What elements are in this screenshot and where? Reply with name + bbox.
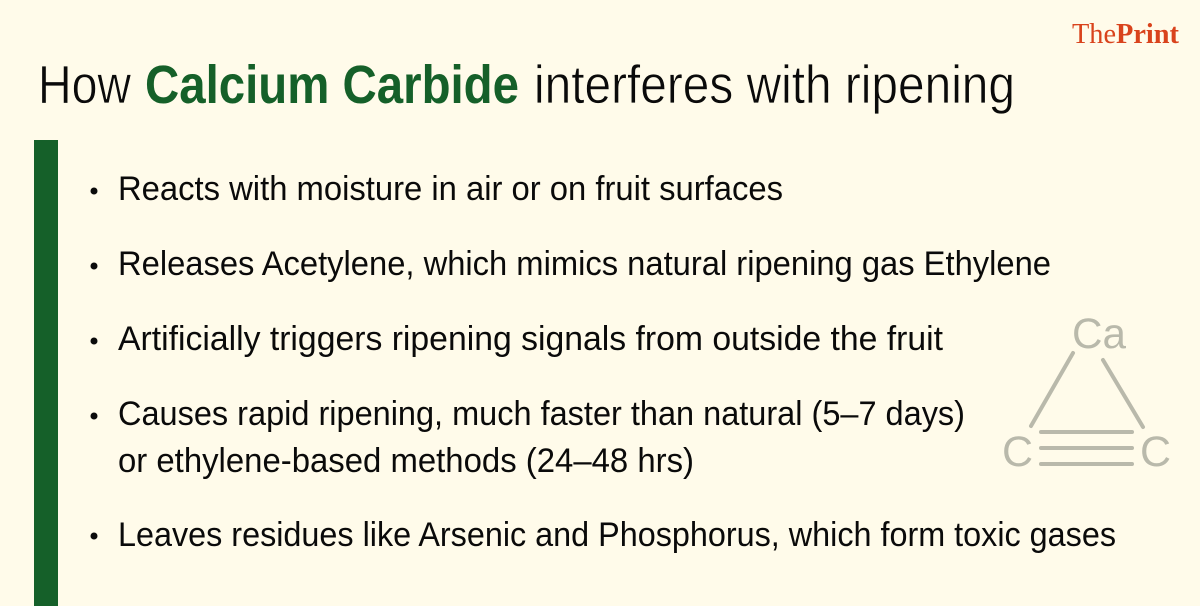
icon: calcium carbide molecule: C [1002,428,1033,476]
bullet list [90,170,1116,554]
bullet 4: or ethylene-based methods (24–48 hrs) [118,442,694,480]
title: Calcium Carbide [145,55,519,115]
bullet 2: Releases Acetylene, which mimics natural ripening gas Ethylene [118,245,1051,283]
bullet 1: Reacts with moisture in air or on fruit surfaces [118,170,783,208]
icon: calcium carbide molecule: C [1140,428,1171,476]
green side bar [34,140,58,606]
title: How [38,55,132,115]
icon: calcium carbide molecule: Ca [1072,310,1126,358]
bullet 5: Leaves residues like Arsenic and Phosphorus, which form toxic gases [118,516,1116,554]
bullet 4: Causes rapid ripening, much faster than natural (5–7 days) [118,395,965,433]
bullet 3: Artificially triggers ripening signals from outside the fruit [118,320,944,358]
logo: ThePrint: ThePrint [1072,19,1180,50]
icon: calcium carbide molecule [1002,310,1171,476]
title: interferes with ripening [534,55,1015,115]
title [38,55,1015,115]
bullet 4 [90,395,965,480]
